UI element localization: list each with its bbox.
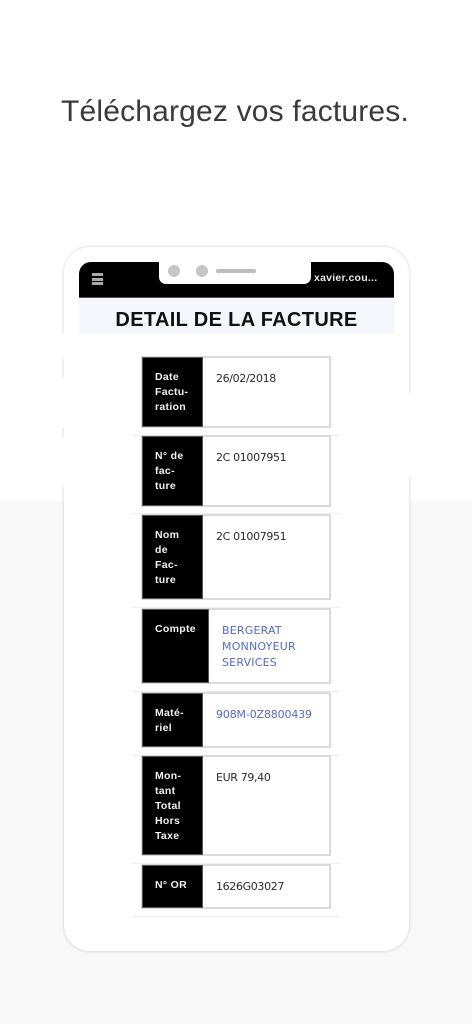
label: Fac- — [155, 559, 178, 571]
label: riel — [155, 722, 172, 734]
label — [142, 756, 203, 855]
table row: invoice name — [141, 514, 331, 600]
phone mockup — [62, 246, 410, 952]
label — [142, 436, 203, 506]
value: MONNOYEUR — [222, 640, 296, 653]
label — [142, 515, 203, 599]
label: Compte — [155, 623, 196, 635]
value: 1626G03027 — [216, 880, 284, 893]
table row: date — [141, 356, 331, 428]
table row: account — [141, 608, 331, 684]
label: ture — [155, 480, 176, 492]
label: Nom — [155, 529, 179, 541]
label: de — [155, 544, 168, 556]
label: N° de — [155, 450, 183, 462]
page heading band — [79, 298, 394, 334]
speaker — [216, 269, 256, 273]
label — [142, 609, 209, 683]
table row: OR number — [141, 864, 331, 909]
notch — [159, 260, 311, 284]
value: SERVICES — [222, 656, 277, 669]
label: ration — [155, 401, 186, 413]
lower background band — [0, 501, 472, 1024]
value: 26/02/2018 — [216, 372, 276, 385]
camera dot — [168, 265, 180, 277]
label — [142, 865, 203, 908]
label: Factu- — [155, 386, 188, 398]
user name: xavier.cou... — [314, 272, 377, 284]
value: BERGERAT — [222, 624, 282, 637]
sensor dot — [196, 265, 208, 277]
label: fac- — [155, 465, 175, 477]
title: Téléchargez vos factures. — [61, 95, 409, 128]
value: EUR 79,40 — [216, 771, 270, 784]
label — [142, 357, 203, 427]
label: Total — [155, 800, 181, 812]
button: left upper — [59, 333, 66, 359]
table row: amount — [141, 755, 331, 856]
label: Hors — [155, 815, 180, 827]
label: Maté- — [155, 707, 184, 719]
label: N° OR — [155, 879, 187, 891]
label: Date — [155, 371, 179, 383]
icon: hamburger menu — [92, 273, 103, 285]
value: 2C 01007951 — [216, 530, 286, 543]
app header bar — [79, 262, 394, 298]
label — [142, 693, 203, 747]
label: Mon- — [155, 770, 181, 782]
label: tant — [155, 785, 175, 797]
page heading: DETAIL DE LA FACTURE — [115, 309, 358, 331]
value: 908M-0Z8800439 — [216, 708, 312, 721]
table row: equipment — [141, 692, 331, 748]
label: Taxe — [155, 830, 179, 842]
table row: invoice number — [141, 435, 331, 507]
button: right — [407, 393, 413, 477]
button: left middle — [59, 378, 66, 428]
value — [222, 624, 296, 669]
button: left lower — [59, 437, 66, 487]
value: 2C 01007951 — [216, 451, 286, 464]
label: ture — [155, 574, 176, 586]
phone body — [64, 247, 409, 951]
